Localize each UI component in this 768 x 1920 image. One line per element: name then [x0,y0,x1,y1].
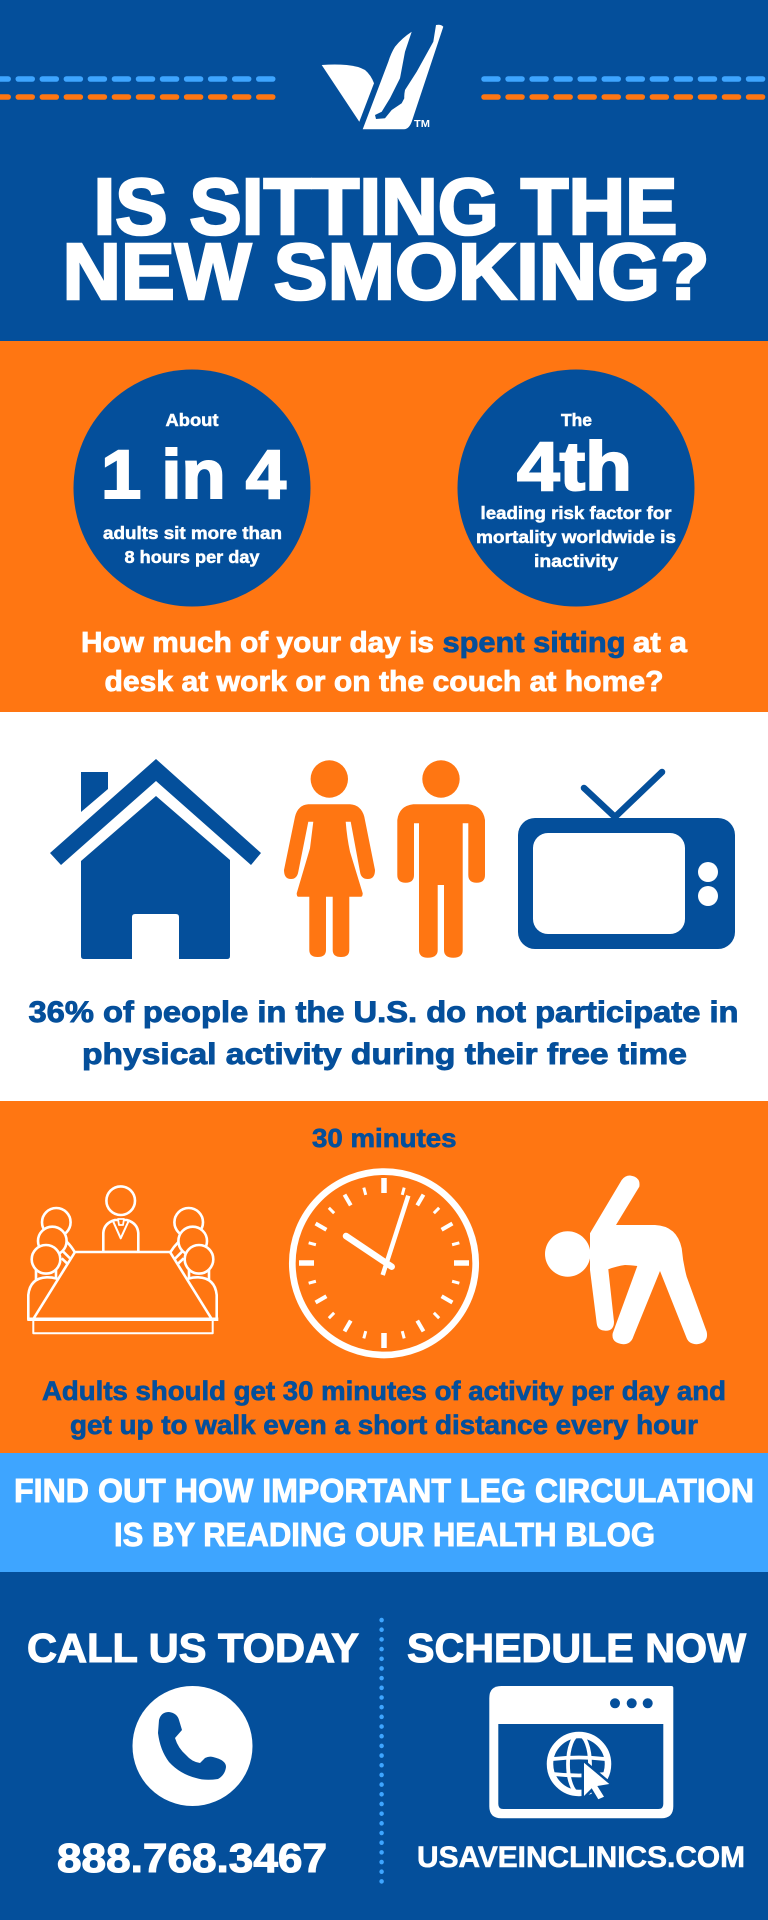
panel: free time activity [0,712,768,1101]
blog call to action text [14,1472,754,1553]
title [62,162,710,316]
free time statistic text: physical activity during their free time [82,1038,687,1071]
stat circle: 1 in 4: About [166,410,219,430]
heading: 30 minutes: 30 minutes [312,1123,456,1153]
icon: man [397,760,485,958]
blog call to action text: FIND OUT HOW IMPORTANT LEG CIRCULATION [14,1472,754,1509]
panel: 30 minutes of activity [0,1101,768,1453]
question text [81,627,688,698]
stat circle: 1 in 4: 1 in 4 [101,436,286,513]
icon: meeting table [27,1186,218,1333]
title: NEW SMOKING? [62,227,710,316]
schedule column [407,1625,746,1874]
icon: woman [284,760,375,957]
free time statistic text: 36% of people in the U.S. do not participate in [28,996,738,1029]
icon: phone [132,1686,252,1806]
stat circle: 1 in 4: 8 hours per day [124,547,260,567]
icon: television [518,772,735,949]
heading: schedule now: SCHEDULE NOW [407,1625,746,1671]
stat circle: 4th: The [561,410,592,430]
stat circle: 4th: mortality worldwide is [476,527,676,547]
panel: contact footer [0,1572,768,1920]
call us column [27,1625,359,1881]
panel: header [0,0,768,341]
panel: sitting statistics [0,341,768,712]
title: IS SITTING THE [94,162,678,251]
question text: desk at work or on the couch at home? [104,666,664,698]
dotted divider [379,1620,384,1882]
stat circle: 4th: 4th [517,428,632,505]
activity recommendation text: Adults should get 30 minutes of activity per day and [42,1376,726,1406]
stat circle: 4th [458,370,694,606]
stat circle: 1 in 4: adults sit more than [103,523,282,543]
heading: call us today: CALL US TODAY [27,1625,359,1671]
free time statistic text [28,996,738,1071]
question text: at a [633,627,688,659]
question text: spent sitting [442,627,626,659]
blog call to action text: IS BY READING OUR HEALTH BLOG [114,1516,655,1553]
icon: clock [292,1172,476,1355]
panel: health blog banner [0,1453,768,1572]
icon: person stretching [545,1176,707,1344]
logo: leaf and leg check mark: TM [414,119,430,130]
icon: browser window with globe [489,1686,673,1818]
activity recommendation text: get up to walk even a short distance every hour [70,1410,698,1440]
question text: How much of your day is [81,627,434,659]
website address: USAVEINCLINICS.COM [417,1841,745,1874]
phone number: 888.768.3467 [57,1835,327,1881]
activity recommendation text [42,1376,726,1440]
stat circle: 4th: inactivity [534,551,618,571]
logo: leaf and leg check mark [322,25,443,130]
left dashed lines [0,79,273,97]
stat circle: 1 in 4 [74,370,310,606]
icon: house [50,759,261,959]
stat circle: 4th: leading risk factor for [480,503,672,523]
right dashed lines [484,79,765,97]
